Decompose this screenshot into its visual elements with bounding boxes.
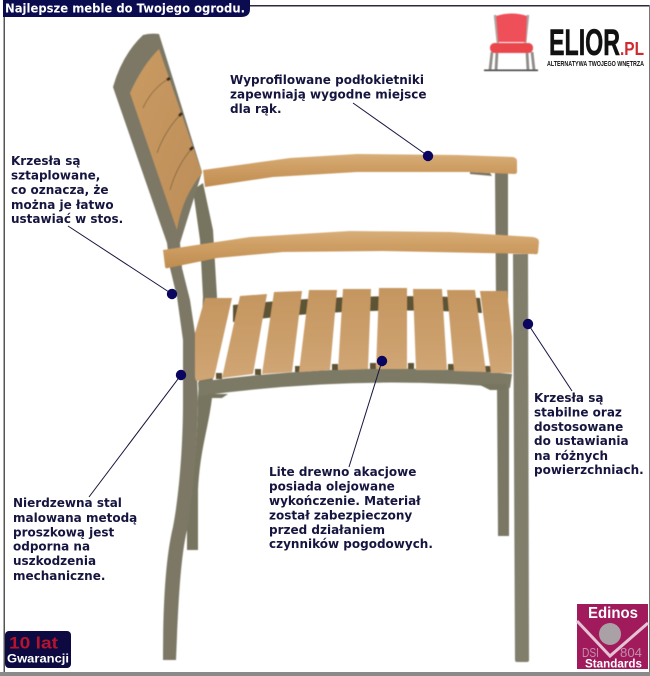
callout text: mechaniczne. xyxy=(13,569,105,583)
seat apron xyxy=(198,369,512,396)
rear armrest xyxy=(203,154,517,187)
callout text: wykończenie. Materiał xyxy=(269,494,421,508)
badge years: 10 lat xyxy=(9,634,58,652)
callout: stackable xyxy=(11,154,177,299)
callout text: Krzesła są xyxy=(11,154,80,168)
leader line xyxy=(528,324,572,391)
callout text: uszkodzenia xyxy=(13,554,96,568)
header banner: Najlepsze meble do Twojego ogrodu. xyxy=(5,2,245,16)
badge DSI: DSI xyxy=(582,646,599,660)
badge: 10 year warranty xyxy=(5,631,71,668)
callout text: proszkową jest xyxy=(13,526,115,540)
leader line xyxy=(68,226,172,294)
callout text: malowana metodą xyxy=(13,511,137,525)
badge: Edinos standards xyxy=(577,604,648,670)
callout text: Lite drewno akacjowe xyxy=(269,465,416,479)
seat rail xyxy=(233,296,482,322)
callout text: dostosowane xyxy=(534,420,623,434)
callout text: do ustawiania xyxy=(534,434,629,448)
callout text: sztaplowane, xyxy=(11,168,100,182)
leader line xyxy=(353,103,428,156)
callout text: odporna na xyxy=(13,540,90,554)
callout text: co oznacza, że xyxy=(11,183,108,197)
callout text: Wyprofilowane podłokietniki xyxy=(230,73,424,87)
badge label: Gwarancji xyxy=(7,654,69,666)
callout text: można je łatwo xyxy=(11,198,114,212)
callout text: posiada olejowane xyxy=(269,480,395,494)
logo: Elior.pl xyxy=(484,14,644,71)
callout text: na różnych xyxy=(534,449,608,463)
callout text: przed działaniem xyxy=(269,523,385,537)
callout text: zapewniają wygodne miejsce xyxy=(230,88,426,102)
callout text: dla rąk. xyxy=(230,102,282,116)
dot xyxy=(523,319,533,329)
back wood panel xyxy=(130,49,202,230)
badge standards: Standards xyxy=(585,656,642,670)
badge 804: 804 xyxy=(620,646,642,660)
front armrest xyxy=(163,231,539,268)
rear right leg and post xyxy=(495,172,509,536)
dot xyxy=(176,370,186,380)
callout text: Nierdzewna stal xyxy=(13,496,122,510)
badge chevron xyxy=(577,621,648,656)
back slat grooves xyxy=(143,78,193,190)
leader line xyxy=(89,375,181,497)
callout text: stabilne oraz xyxy=(534,406,622,420)
rear left leg and post xyxy=(187,183,217,550)
front right leg xyxy=(513,254,529,662)
callout text: czynników pogodowych. xyxy=(269,537,433,551)
dot xyxy=(423,151,433,161)
callout text: Krzesła są xyxy=(534,391,603,405)
callout text: ustawiać w stos. xyxy=(11,212,123,226)
seat slats xyxy=(195,288,512,381)
dot xyxy=(167,289,177,299)
badge circle xyxy=(599,623,621,645)
callout text: został zabezpieczony xyxy=(269,508,412,522)
callout: armrests xyxy=(230,73,433,161)
back frame and front left leg xyxy=(113,34,202,660)
callout: steel frame xyxy=(13,370,186,583)
logo domain suffix: .PL xyxy=(620,39,644,59)
callout text: powierzchniach. xyxy=(534,463,644,477)
callout: acacia wood xyxy=(269,356,433,551)
leader line xyxy=(349,361,382,467)
chair illustration xyxy=(113,34,539,662)
dot xyxy=(377,356,387,366)
callout: stability xyxy=(523,319,644,477)
badge title: Edinos xyxy=(588,605,638,622)
icon: red chair xyxy=(484,14,538,71)
